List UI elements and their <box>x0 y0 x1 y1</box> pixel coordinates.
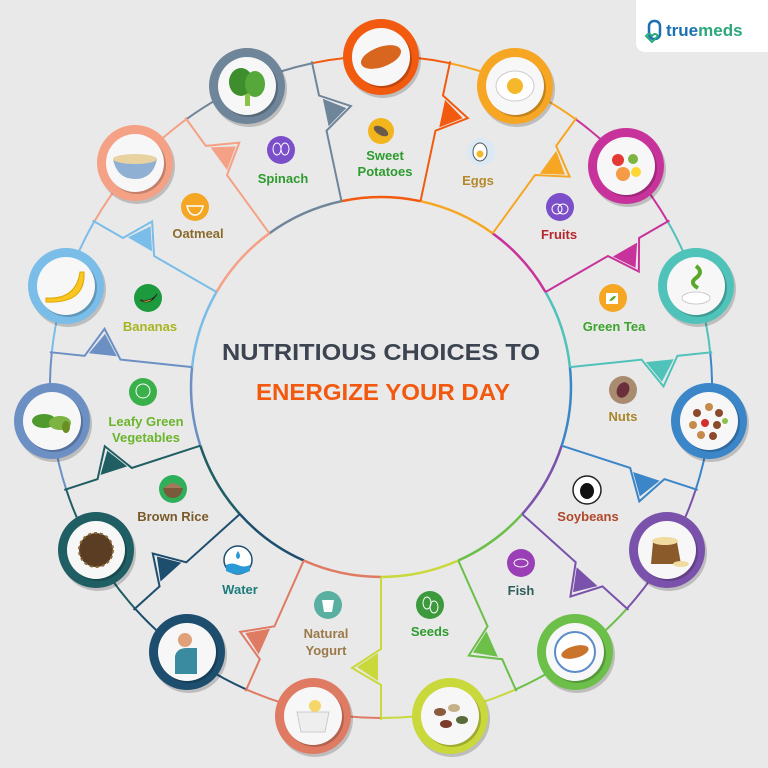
label: fruits: Fruits <box>541 227 577 242</box>
photo: leafy green vegetables <box>14 383 92 462</box>
photo: spinach <box>209 48 287 127</box>
photo: water <box>149 614 227 693</box>
label: oatmeal <box>172 193 224 241</box>
photo: bananas <box>28 248 106 327</box>
label: natural yogurt <box>304 591 348 658</box>
photo: natural yogurt <box>275 678 353 757</box>
logo <box>636 0 768 52</box>
label: sweet potatoes: Sweet <box>366 148 404 163</box>
label: sweet potatoes: Potatoes <box>358 164 412 179</box>
label: eggs: Eggs <box>462 173 494 188</box>
label: eggs <box>462 138 495 188</box>
photo: nuts <box>671 383 749 462</box>
label: natural yogurt: Yogurt <box>306 643 347 658</box>
label: fish <box>507 549 535 598</box>
photo: fish <box>537 614 615 693</box>
photo: soybeans <box>629 512 707 591</box>
arrow: sector boundaries <box>50 55 715 720</box>
photo: brown rice <box>58 512 136 591</box>
title: ENERGIZE YOUR DAY <box>256 379 510 405</box>
outer ring segments <box>45 56 717 725</box>
label: soybeans: Soybeans <box>557 509 619 524</box>
label: leafy green vegetables <box>108 378 184 445</box>
label: soybeans <box>557 476 619 524</box>
label: fruits <box>541 193 577 242</box>
photo: eggs <box>477 48 555 127</box>
label: water <box>222 546 258 597</box>
label: fish: Fish <box>508 583 534 598</box>
label: brown rice <box>137 475 209 524</box>
label: oatmeal: Oatmeal <box>172 226 224 241</box>
label: seeds: Seeds <box>411 624 449 639</box>
label: leafy green vegetables: Leafy Green <box>108 414 184 429</box>
label: natural yogurt: Natural <box>304 626 348 641</box>
label: leafy green vegetables: Vegetables <box>112 430 180 445</box>
photo: sweet potatoes <box>343 19 421 98</box>
label: brown rice: Brown Rice <box>137 509 209 524</box>
label: bananas: Bananas <box>123 319 177 334</box>
title <box>222 339 540 405</box>
photo: green tea <box>658 248 736 327</box>
label: sweet potatoes <box>358 118 412 179</box>
label: nuts <box>609 376 637 424</box>
label: spinach: Spinach <box>258 171 308 186</box>
label: green tea <box>583 284 646 334</box>
label: green tea: Green Tea <box>583 319 646 334</box>
label: water: Water <box>222 582 258 597</box>
label: spinach <box>258 136 308 186</box>
logo: truemeds <box>666 21 743 40</box>
title: NUTRITIOUS CHOICES TO <box>222 339 540 365</box>
inner circle ring segments <box>188 197 574 581</box>
label: nuts: Nuts <box>609 409 637 424</box>
label: seeds <box>411 591 449 639</box>
label: bananas <box>123 284 177 334</box>
photo: seeds <box>412 678 490 757</box>
photo: oatmeal <box>97 125 175 204</box>
photo: fruits <box>588 128 666 207</box>
